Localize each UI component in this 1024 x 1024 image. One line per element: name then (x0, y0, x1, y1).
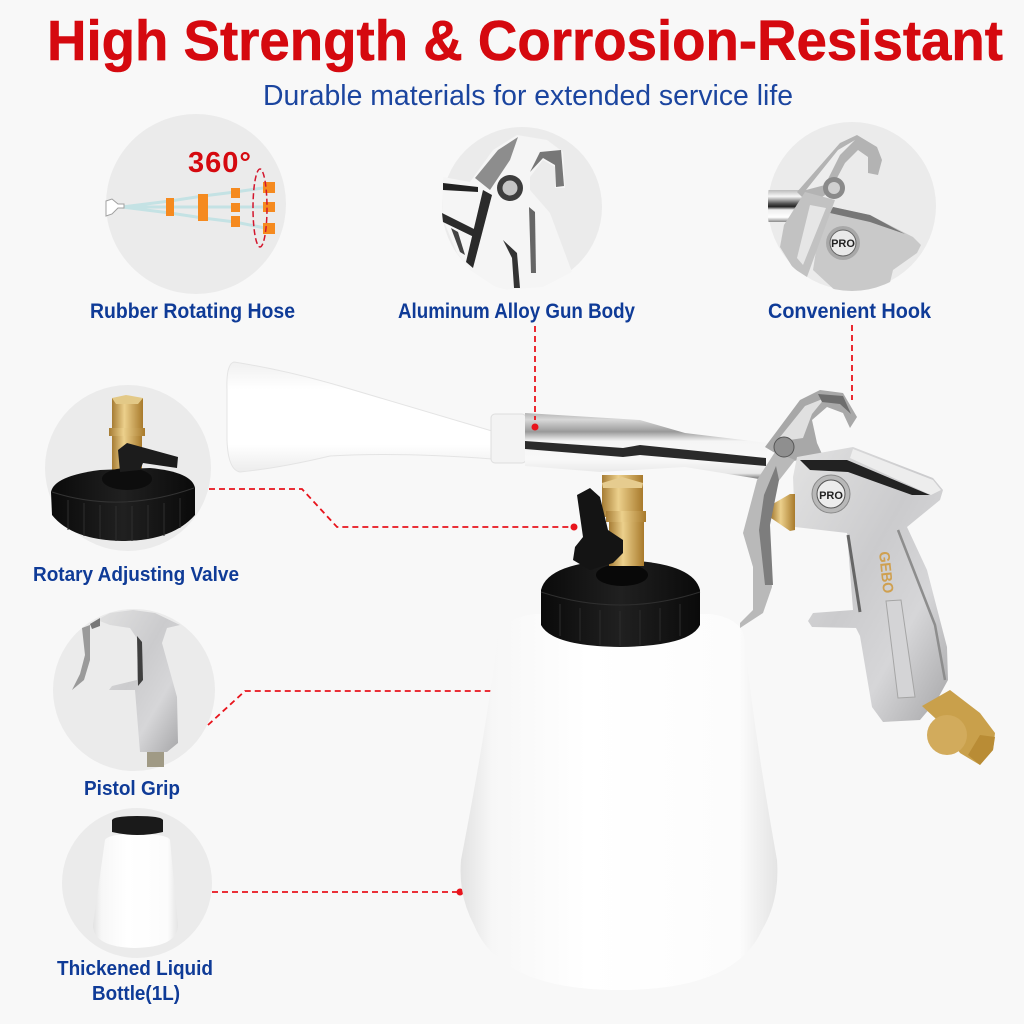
icon: small bottle (93, 834, 178, 948)
icon: small bottle cap (112, 816, 163, 835)
nozzle collar (491, 414, 526, 463)
bottle cap (541, 560, 700, 647)
icon: black cap (51, 468, 195, 541)
text: PRO badge: PRO (831, 238, 855, 250)
brass valve (602, 475, 646, 566)
valve lever (573, 488, 623, 570)
brass stem (771, 494, 795, 531)
brass air fitting (922, 690, 995, 765)
icon: hose nozzle (106, 199, 124, 216)
connector: bottle (212, 888, 464, 896)
connector: pistol grip (208, 691, 495, 725)
panel: pistol grip (53, 609, 215, 771)
icon: orange rotating tips (166, 182, 275, 234)
connector: gun body (532, 326, 538, 430)
subtitle: Durable materials for extended service life (263, 80, 793, 112)
panel: convenient hook (768, 122, 936, 295)
label: rubber rotating hose: Rubber Rotating Hose (90, 300, 295, 323)
icon: valve lever (118, 443, 178, 472)
icon: rotation ring (253, 169, 267, 247)
label: thickened liquid bottle: Thickened Liquid (57, 958, 213, 980)
gun body (793, 447, 948, 722)
bottle body (461, 614, 777, 990)
PRO badge (812, 475, 850, 513)
PRO badge: PRO (819, 490, 843, 502)
text: brand mark: GEBO (875, 551, 896, 594)
label: rotary adjusting valve: Rotary Adjusting Valve (33, 564, 239, 586)
grip recess (886, 600, 915, 698)
trigger (740, 452, 795, 628)
label: pistol grip: Pistol Grip (84, 778, 180, 800)
connector: hook (851, 325, 853, 400)
icon: pistol grip silhouette (97, 610, 180, 752)
connector: valve (209, 489, 578, 530)
panel: thickened liquid bottle (62, 808, 212, 958)
label: thickened liquid bottle: Bottle(1L) (92, 983, 180, 1005)
icon: spray streams (122, 187, 270, 229)
title: High Strength & Corrosion-Resistant (47, 9, 1003, 73)
chrome tube (525, 413, 768, 480)
panel: aluminum alloy gun body (442, 127, 602, 290)
panel: rotary adjusting valve (45, 385, 211, 551)
label: thickened liquid bottle (57, 958, 213, 1005)
label: convenient hook: Convenient Hook (768, 300, 931, 323)
illustration: foam gun (227, 362, 995, 990)
white nozzle (227, 362, 492, 472)
icon: brass valve (109, 395, 145, 472)
pivot pin (774, 437, 794, 457)
hook (765, 390, 857, 462)
close-up: chrome gun head (442, 135, 572, 290)
panel: rubber rotating hose (106, 114, 286, 294)
close-up: gun hook (768, 135, 921, 295)
label: aluminum alloy gun body: Aluminum Alloy Gun Body (398, 300, 635, 323)
label: 360 degrees: 360° (188, 147, 251, 179)
